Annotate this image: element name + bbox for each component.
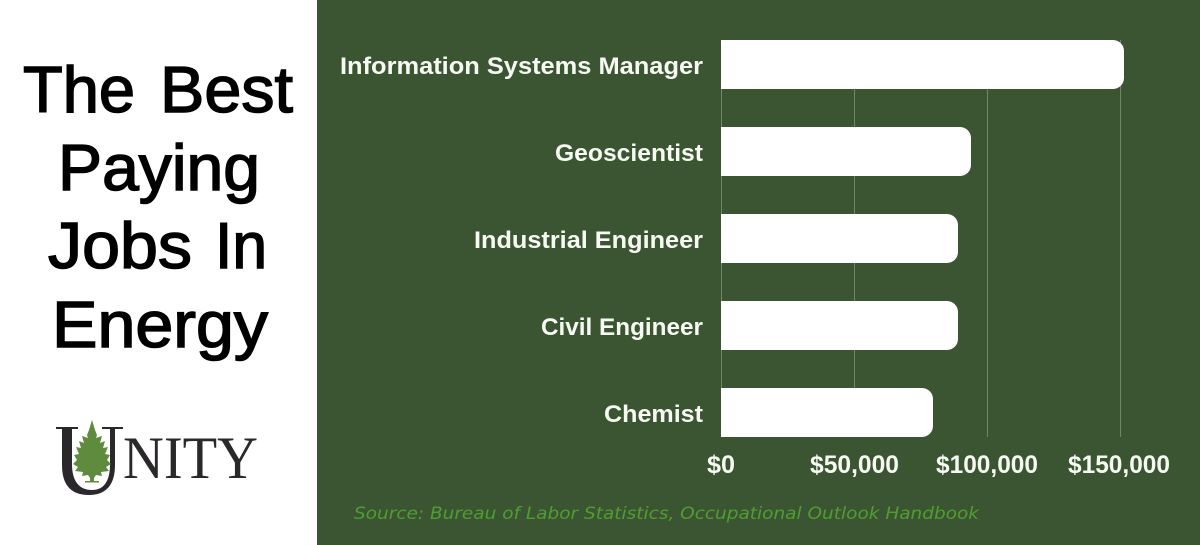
title: Energy: [52, 288, 269, 361]
title: Jobs: [48, 209, 192, 282]
x axis labels: $0: [707, 451, 735, 479]
category labels: [340, 53, 703, 428]
x axis labels: [707, 451, 1170, 479]
category labels: Chemist: [604, 401, 703, 428]
chart gridlines: [722, 40, 1120, 437]
x axis labels: $150,000: [1068, 451, 1170, 479]
bar: Geoscientist: [721, 127, 971, 176]
icon: pine tree: [73, 420, 111, 482]
title: The: [23, 53, 135, 126]
category labels: Civil Engineer: [541, 314, 703, 341]
category labels: Geoscientist: [555, 140, 703, 167]
panel: left white background: [0, 0, 317, 545]
x axis labels: $100,000: [936, 451, 1038, 479]
title: In: [215, 209, 267, 282]
bar: Information Systems Manager: [721, 40, 1124, 89]
icon: letter U: [56, 427, 123, 495]
bar: Industrial Engineer: [721, 214, 958, 263]
title: Best: [160, 53, 293, 126]
bar: Civil Engineer: [721, 301, 958, 350]
source note: Source: Bureau of Labor Statistics, Occupational Outlook Handbook: [354, 504, 980, 524]
title: Paying: [58, 131, 260, 204]
title: [23, 53, 293, 361]
x axis labels: $50,000: [810, 451, 899, 479]
bar chart: [340, 40, 1170, 479]
logo wordmark: NITY: [123, 425, 258, 491]
category labels: Industrial Engineer: [474, 227, 703, 254]
icon: Unity logo: [56, 420, 258, 495]
bar: Chemist: [721, 388, 933, 437]
category labels: Information Systems Manager: [340, 53, 703, 80]
panel: green chart background: [317, 0, 1200, 545]
